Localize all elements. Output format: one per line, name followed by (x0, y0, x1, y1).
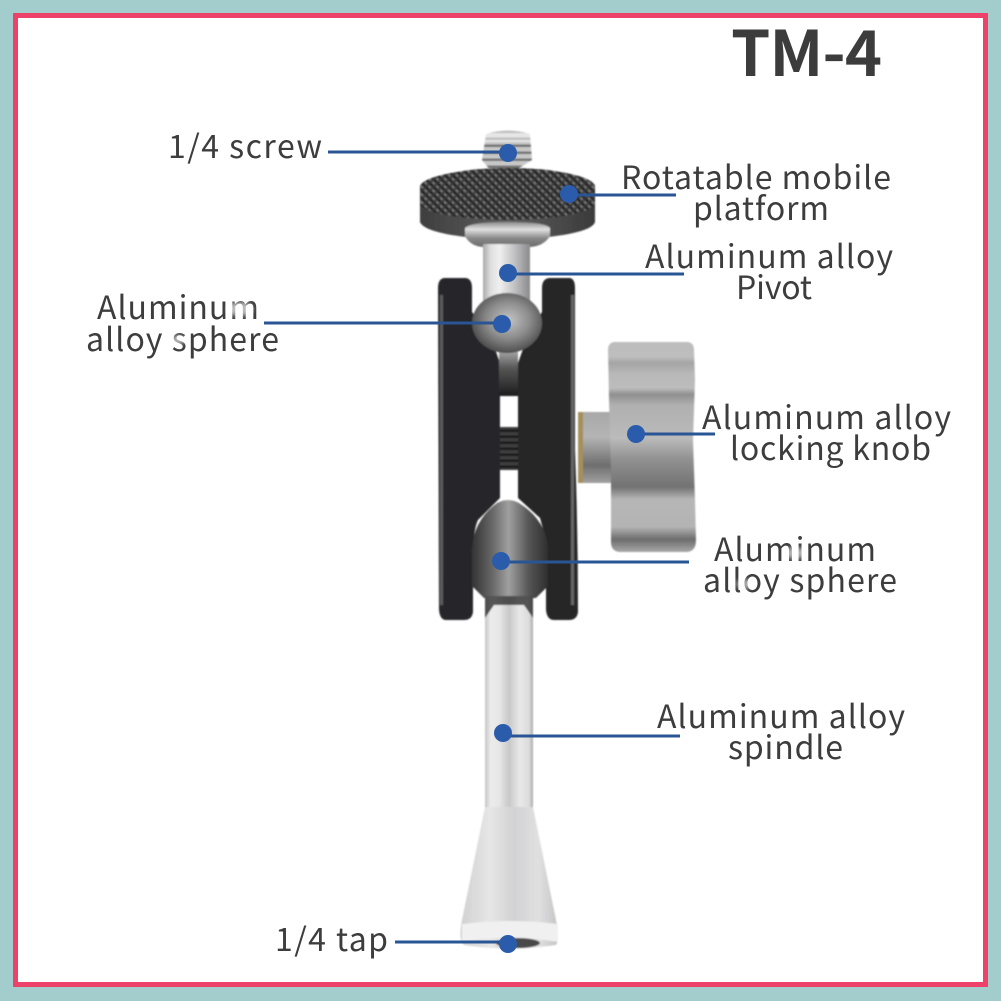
label: rotatable mobile platform: Rotatable mobile (621, 153, 891, 199)
rotatable platform knurl (420, 168, 595, 220)
right clamp plate (518, 278, 578, 620)
label: aluminum alloy sphere right: Aluminum (714, 525, 876, 571)
label: aluminum alloy pivot: Pivot (736, 263, 812, 309)
lower sphere (472, 500, 548, 598)
label: aluminum alloy spindle: Aluminum alloy (657, 692, 905, 738)
product: ball arm (420, 128, 696, 948)
label: aluminum alloy sphere left: alloy sphere (86, 315, 279, 361)
knob neck (583, 412, 613, 483)
label: aluminum alloy pivot (499, 232, 893, 309)
label: aluminum alloy sphere left (86, 283, 511, 361)
label: aluminum alloy locking knob (627, 393, 951, 470)
rotatable platform base (420, 200, 595, 237)
label: aluminum alloy spindle (494, 692, 905, 769)
collar (465, 222, 550, 247)
label: 1/4 tap: 1/4 tap (275, 915, 388, 961)
label: 1/4 screw (168, 122, 517, 168)
title: TM-4 (731, 4, 882, 95)
spindle cone (460, 807, 558, 948)
label: rotatable mobile platform: platform (693, 184, 829, 230)
label: 1/4 screw: 1/4 screw (168, 122, 322, 168)
label: aluminum alloy spindle: spindle (728, 723, 843, 769)
tap hole (496, 938, 540, 948)
1/4 screw thread (482, 130, 532, 170)
cone rim (462, 921, 558, 942)
plate edge highlights (440, 295, 443, 605)
label: aluminum alloy locking knob: Aluminum alloy (702, 393, 951, 439)
pivot (483, 244, 530, 304)
neck under upper sphere (499, 350, 518, 396)
upper sphere (472, 293, 542, 353)
label: aluminum alloy sphere right (492, 525, 897, 602)
label: aluminum alloy sphere right: alloy sphere (703, 556, 897, 602)
label: rotatable mobile platform (560, 153, 891, 230)
label: aluminum alloy sphere left: Aluminum (97, 283, 259, 329)
spindle collar shadow (485, 596, 533, 618)
label: aluminum alloy locking knob: locking knob (730, 424, 931, 470)
label: aluminum alloy pivot: Aluminum alloy (645, 232, 893, 278)
brass washer (578, 412, 584, 483)
locking knob (608, 342, 696, 552)
bolt (500, 427, 518, 470)
left clamp plate (438, 278, 500, 620)
spindle (485, 596, 533, 808)
label: 1/4 tap (275, 915, 517, 961)
